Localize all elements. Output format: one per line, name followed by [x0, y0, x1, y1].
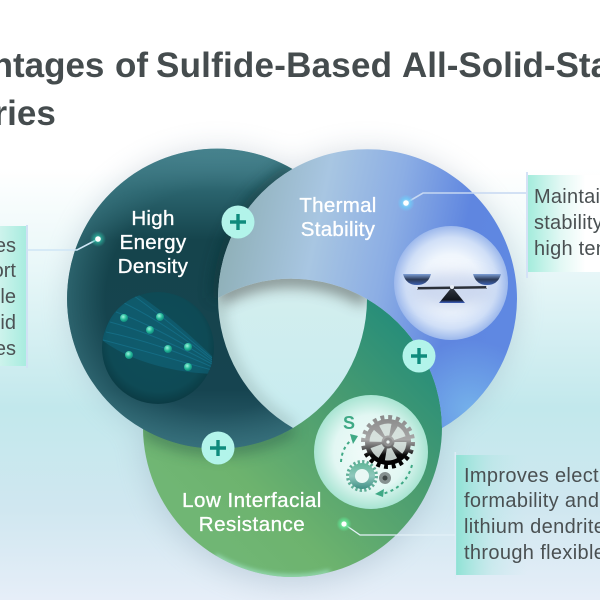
- title: of: [115, 46, 148, 85]
- callout: low interfacial resistance description: [336, 452, 600, 579]
- venn diagram: [67, 149, 517, 584]
- central hole: [218, 279, 367, 428]
- connector dot: [90, 231, 106, 247]
- label: thermal stability: Stability: [301, 218, 376, 241]
- icon: gears with strain arrows: [314, 395, 428, 509]
- letter S: S: [343, 413, 355, 433]
- connector dot: [398, 194, 414, 212]
- big gear: [364, 418, 412, 466]
- small teal gear: [348, 462, 376, 490]
- panel: high energy density crescent: [67, 149, 293, 449]
- callout: thermal stability description: [398, 172, 600, 278]
- connector: [344, 524, 455, 535]
- tiny gear: [379, 472, 391, 484]
- connector: [28, 239, 98, 250]
- label: high energy density: Density: [118, 255, 189, 278]
- label: high energy density: High: [131, 207, 175, 230]
- dashed rotation arrows: [341, 438, 412, 494]
- panel: low interfacial resistance crescent: [143, 299, 442, 577]
- label: high energy density: Energy: [120, 231, 187, 254]
- plus badge: green and dark: [202, 432, 234, 464]
- panel: thermal stability crescent: [218, 149, 517, 428]
- label: low interfacial resistance: Low Interfacial: [182, 489, 322, 512]
- label: low interfacial resistance: Resistance: [199, 513, 305, 536]
- connector dot: [336, 516, 352, 532]
- icon: lithium ion battery particles: [102, 292, 214, 404]
- plus badge: blue and green: [402, 340, 436, 372]
- soft halo behind circles: [68, 149, 517, 584]
- label: thermal stability: Thermal: [299, 194, 377, 217]
- callout: high energy density description: [0, 225, 106, 368]
- title: Sulfide-Based: [156, 46, 392, 85]
- icon: balance scale: [394, 226, 508, 340]
- connector: [406, 193, 526, 203]
- plus badge: dark and blue: [222, 206, 254, 238]
